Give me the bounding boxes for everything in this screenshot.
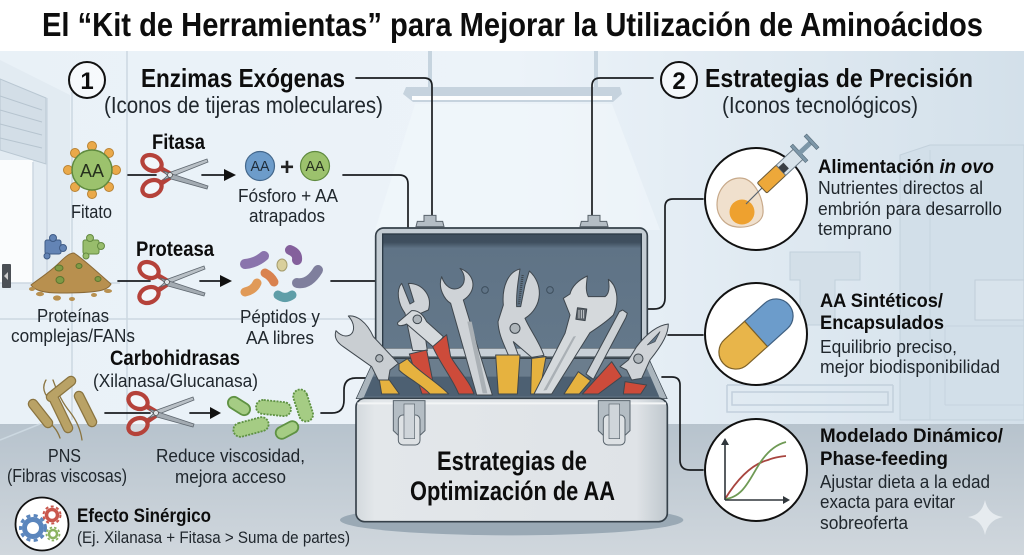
strategy: in ovo: Nutrientes directos al [818,177,983,198]
row: fitasa [64,131,339,226]
tools [335,268,668,395]
section 1 heading: (Iconos de tijeras moleculares) [104,92,383,118]
toolbox label: Optimización de AA [410,476,615,506]
icon: scissors proteasa [137,259,205,306]
icon: peptide fragments [245,250,318,298]
lid with hinges [376,215,647,358]
row: carbohidrasas [7,347,315,487]
strategy: in ovo: temprano [818,218,892,239]
synergy note: Efecto Sinérgico [77,505,211,527]
icon: fosforo + AA: + [280,154,294,181]
row: carbohidrasas: Carbohidrasas [110,347,240,370]
row: proteasa: complejas/FANs [11,325,135,346]
strategy: dynamic modelling [705,419,1004,533]
icon: fitato molecule: AA [80,161,104,181]
strategy: in ovo: Alimentación in ovo [818,156,994,178]
strategy: synthetic AA: Encapsulados [820,312,944,334]
arrow [200,275,232,287]
back tools [440,268,492,395]
row: carbohidrasas: (Xilanasa/Glucanasa) [93,370,258,391]
row: carbohidrasas: mejora acceso [175,466,286,487]
row: carbohidrasas: Reduce viscosidad, [156,445,305,466]
icon: fosforo + AA: AA [306,159,325,175]
connector lines [321,78,703,470]
latch right [598,401,630,445]
icon: fosforo + AA: AA [250,159,270,175]
icon: green bacteria [226,388,315,441]
box body [356,398,667,522]
row: proteasa: Péptidos y [240,306,321,327]
icon: scissors carbohidrasas [126,390,194,437]
row: fitasa: Fósforo + AA [238,185,339,206]
row: fitasa: Fitasa [152,131,205,154]
box interior [357,358,667,398]
latch left [393,401,425,445]
icon: fitato molecule [64,142,120,198]
row: proteasa: AA libres [246,327,314,348]
section 2 heading: 2 [672,68,686,95]
row: proteasa [11,234,321,348]
row: proteasa: Proteasa [136,238,214,261]
icon: scissors fitasa [140,152,208,199]
arrow [190,407,221,419]
strategy: synthetic AA: AA Sintéticos/ [820,290,944,312]
section 2 heading [661,62,973,118]
section 2 heading: (Iconos tecnológicos) [722,92,918,118]
strategy: in ovo: embrión para desarrollo [818,198,1002,219]
row: carbohidrasas: (Fibras viscosas) [7,465,127,486]
icon: capsule [705,283,807,385]
strategy: in ovo [705,133,1002,250]
icon: egg and syringe [705,133,820,250]
strategy: dynamic modelling: Ajustar dieta a la edad [820,471,990,492]
row: carbohidrasas: PNS [48,445,81,466]
row: fitasa: Fitato [71,201,112,222]
toolbox [335,215,683,535]
icon: growth curves chart [705,419,807,521]
section 1 heading: 1 [80,68,94,95]
icon: fosforo + AA [246,152,330,181]
title band [0,0,1024,51]
synergy note [16,498,350,550]
strategy: dynamic modelling: exacta para evitar [820,491,955,512]
icon: viscous fibres [33,380,92,440]
toolbox label [410,446,615,506]
row: proteasa: Proteínas [37,305,109,326]
strategy: synthetic AA: Equilibrio preciso, [820,336,957,357]
strategy: dynamic modelling: sobreoferta [820,512,909,533]
toolbox label: Estrategias de [437,446,587,476]
row: fitasa: atrapados [249,205,325,226]
synergy note: (Ej. Xilanasa + Fitasa > Suma de partes) [77,528,350,547]
strategy: dynamic modelling: Modelado Dinámico/ [820,425,1004,447]
right pliers [582,362,622,394]
section 1 heading [69,62,383,118]
icon: gears [16,498,68,550]
left wrench [379,380,399,394]
icon: protein pile and puzzle pieces [29,234,112,301]
strategy: synthetic AA [705,283,1000,385]
section 1 heading: Enzimas Exógenas [141,63,345,93]
section 2 heading: Estrategias de Precisión [705,63,973,93]
strategy: synthetic AA: mejor biodisponibilidad [820,356,1000,377]
arrow [202,169,236,181]
icon: side handle [2,264,11,288]
icon: sparkle watermark [968,500,1003,535]
strategy: dynamic modelling: Phase-feeding [820,448,948,470]
